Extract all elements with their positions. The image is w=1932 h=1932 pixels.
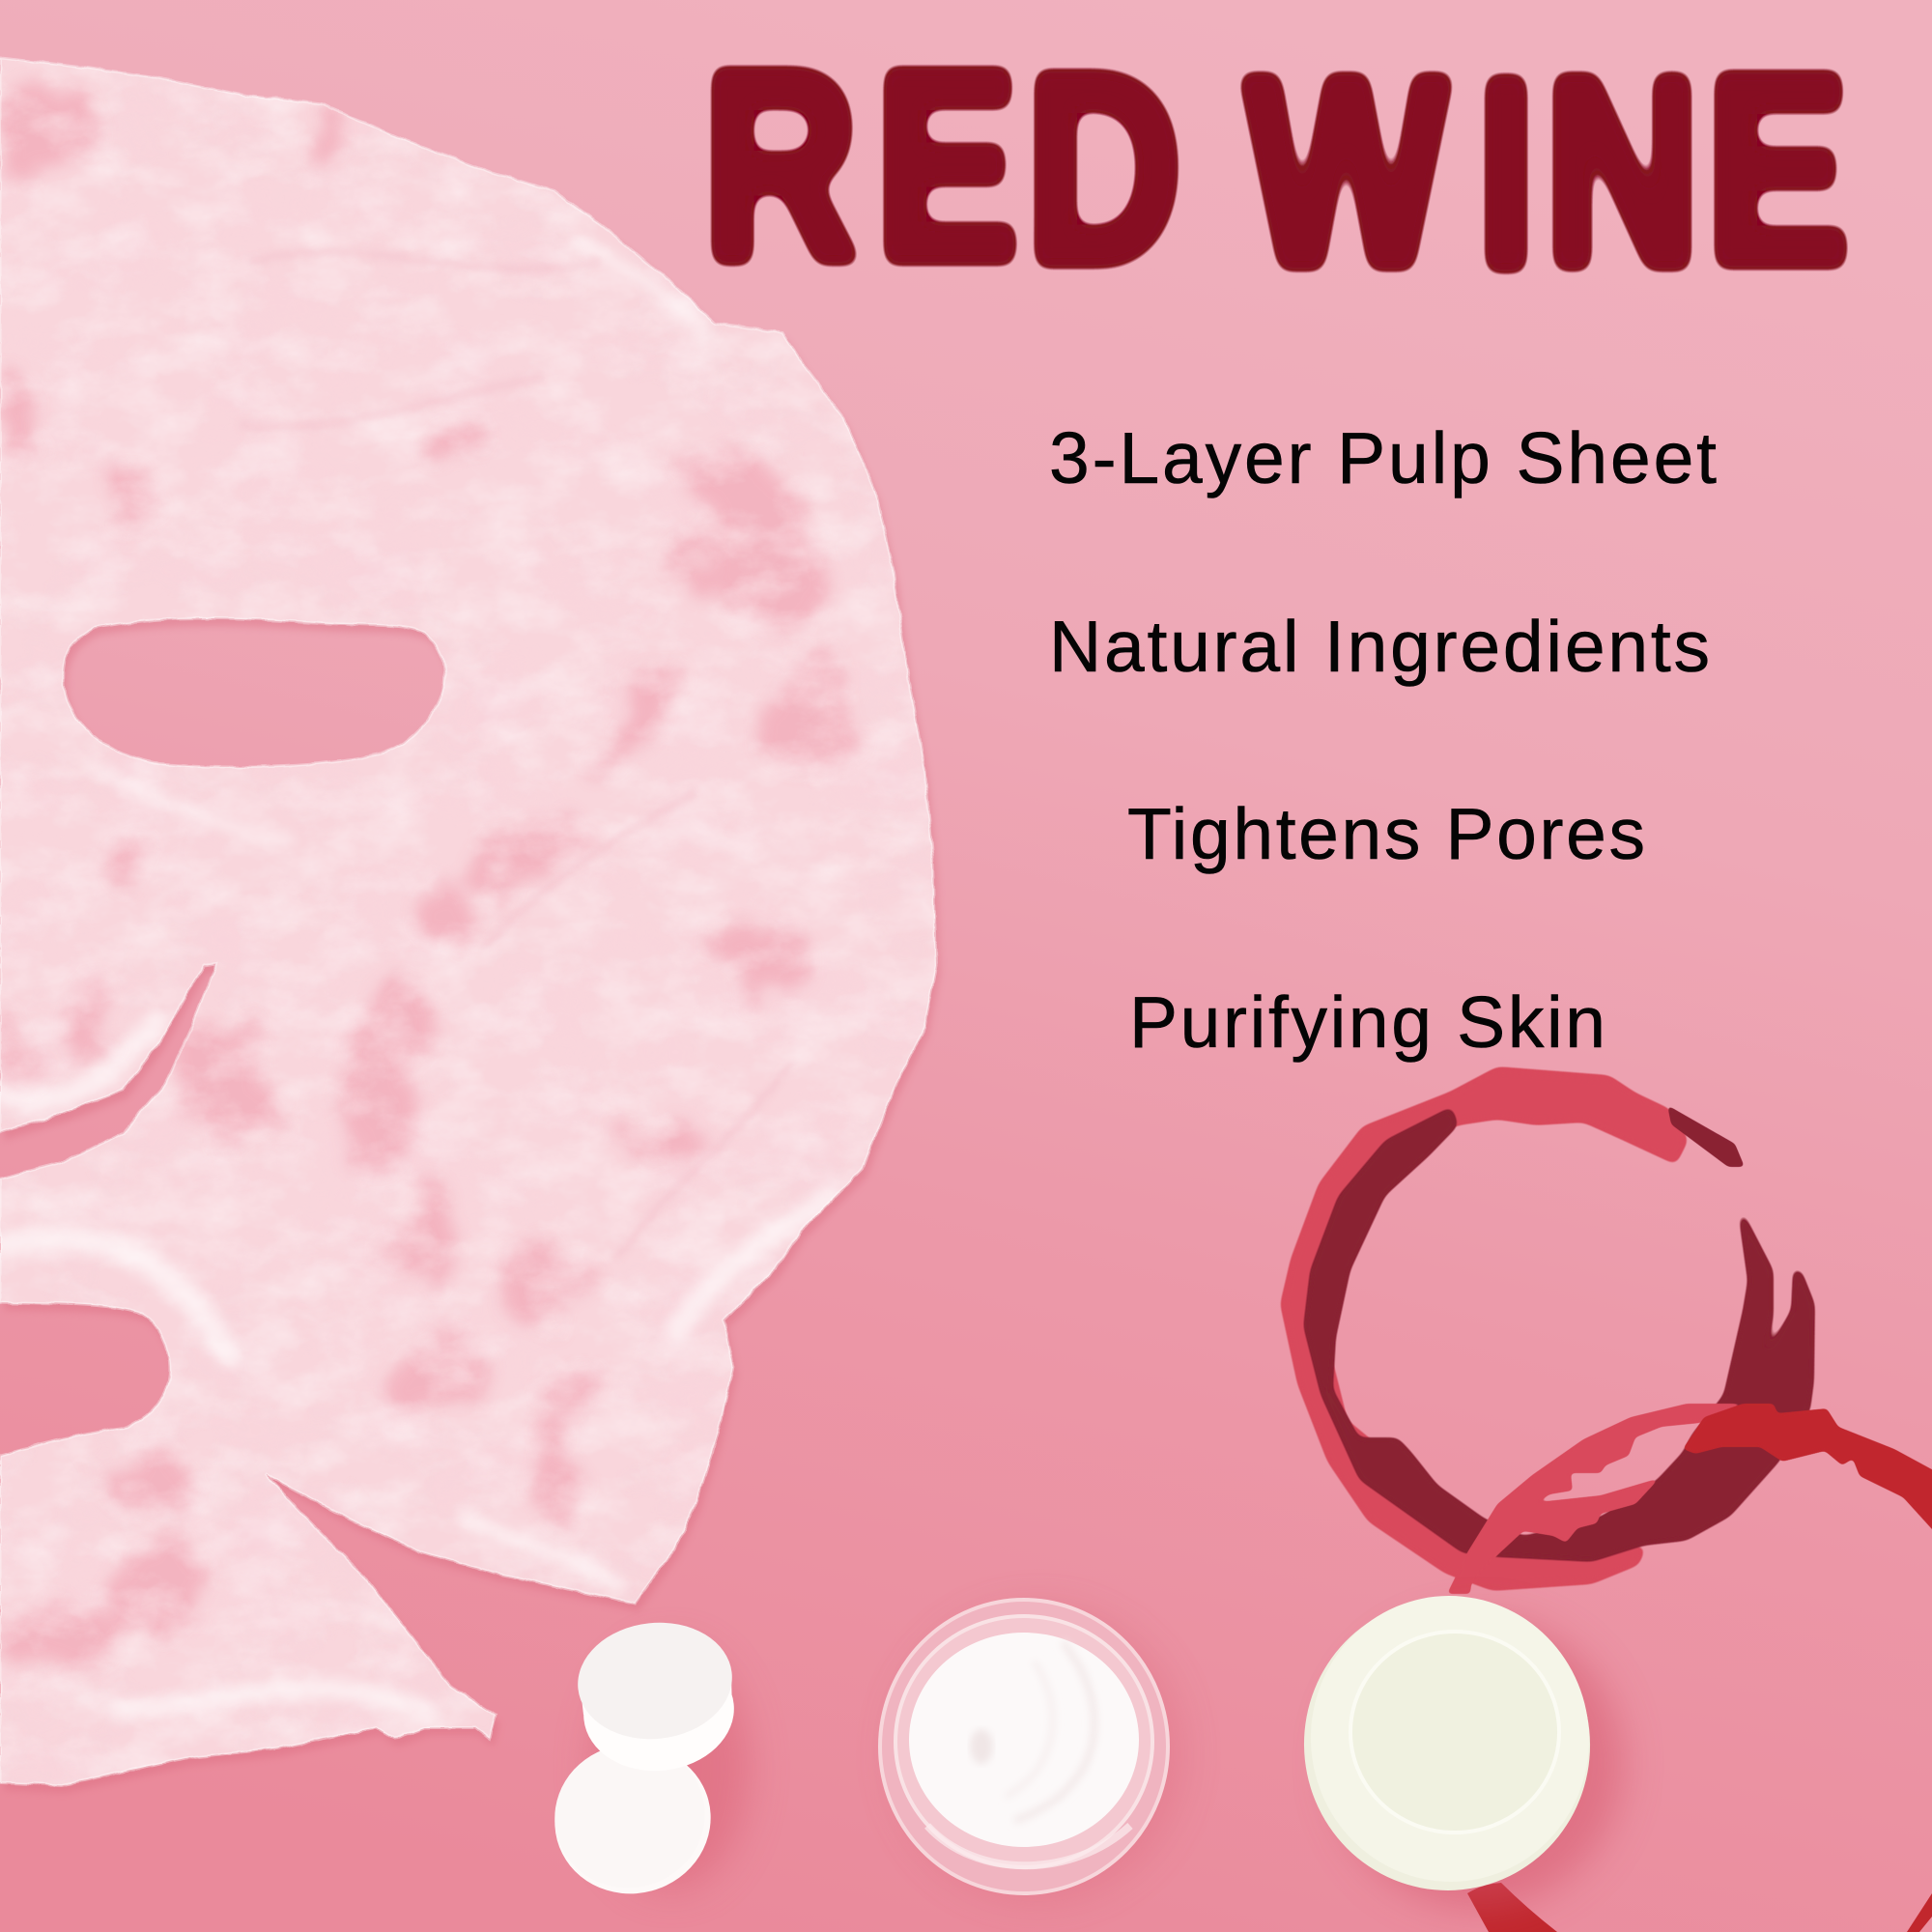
soap shadow (1333, 1618, 1623, 1908)
bottom red arc left (1467, 1883, 1557, 1932)
second ring red layer (1683, 1404, 1932, 1572)
upper pad body (580, 1676, 732, 1715)
bottom red arc right (1907, 1893, 1932, 1932)
white wrinkle highlights (0, 242, 831, 1710)
cream swirl (1005, 1642, 1094, 1821)
feature: pores: Tightens Pores (1127, 793, 1645, 874)
first ring light layer (1280, 1066, 1689, 1591)
feature: 3-layer: 3-Layer Pulp Sheet (1049, 417, 1717, 498)
upper pad face (572, 1615, 738, 1747)
pad shadow (594, 1647, 749, 1889)
stain blotches (0, 95, 867, 1662)
jar shadow (894, 1606, 1183, 1900)
soap bar (1290, 1582, 1623, 1908)
jar glass (880, 1600, 1168, 1893)
title: RED WINE (702, 14, 1850, 325)
top-right dash (1667, 1105, 1745, 1167)
feature list (1049, 417, 1717, 1063)
sheet mask (0, 48, 947, 1797)
feature: natural: Natural Ingredients (1049, 606, 1710, 687)
cream jar (880, 1600, 1183, 1900)
soap top (1296, 1582, 1604, 1895)
cream swirl centre (970, 1729, 993, 1764)
crumple texture (0, 48, 947, 1797)
jar bottom threads (927, 1826, 1130, 1865)
torn rim (0, 58, 936, 1785)
cream (909, 1633, 1139, 1847)
mask sheet base (0, 58, 936, 1785)
upper pad side (578, 1645, 740, 1778)
second ring light layer (1447, 1404, 1745, 1594)
jar rim (895, 1616, 1152, 1867)
dye wash (0, 48, 947, 1797)
mask shadow (4, 66, 940, 1793)
feature: purifying: Purifying Skin (1129, 981, 1605, 1063)
soap edge (1290, 1584, 1605, 1905)
cotton compress pads (538, 1615, 749, 1911)
wine stain rings (1280, 1066, 1932, 1932)
first ring dark layer (1303, 1106, 1815, 1562)
lower pad (538, 1729, 727, 1911)
pink wrinkle shades (242, 252, 792, 1256)
soap inner disc (1350, 1632, 1559, 1833)
lower pad face (539, 1727, 721, 1905)
